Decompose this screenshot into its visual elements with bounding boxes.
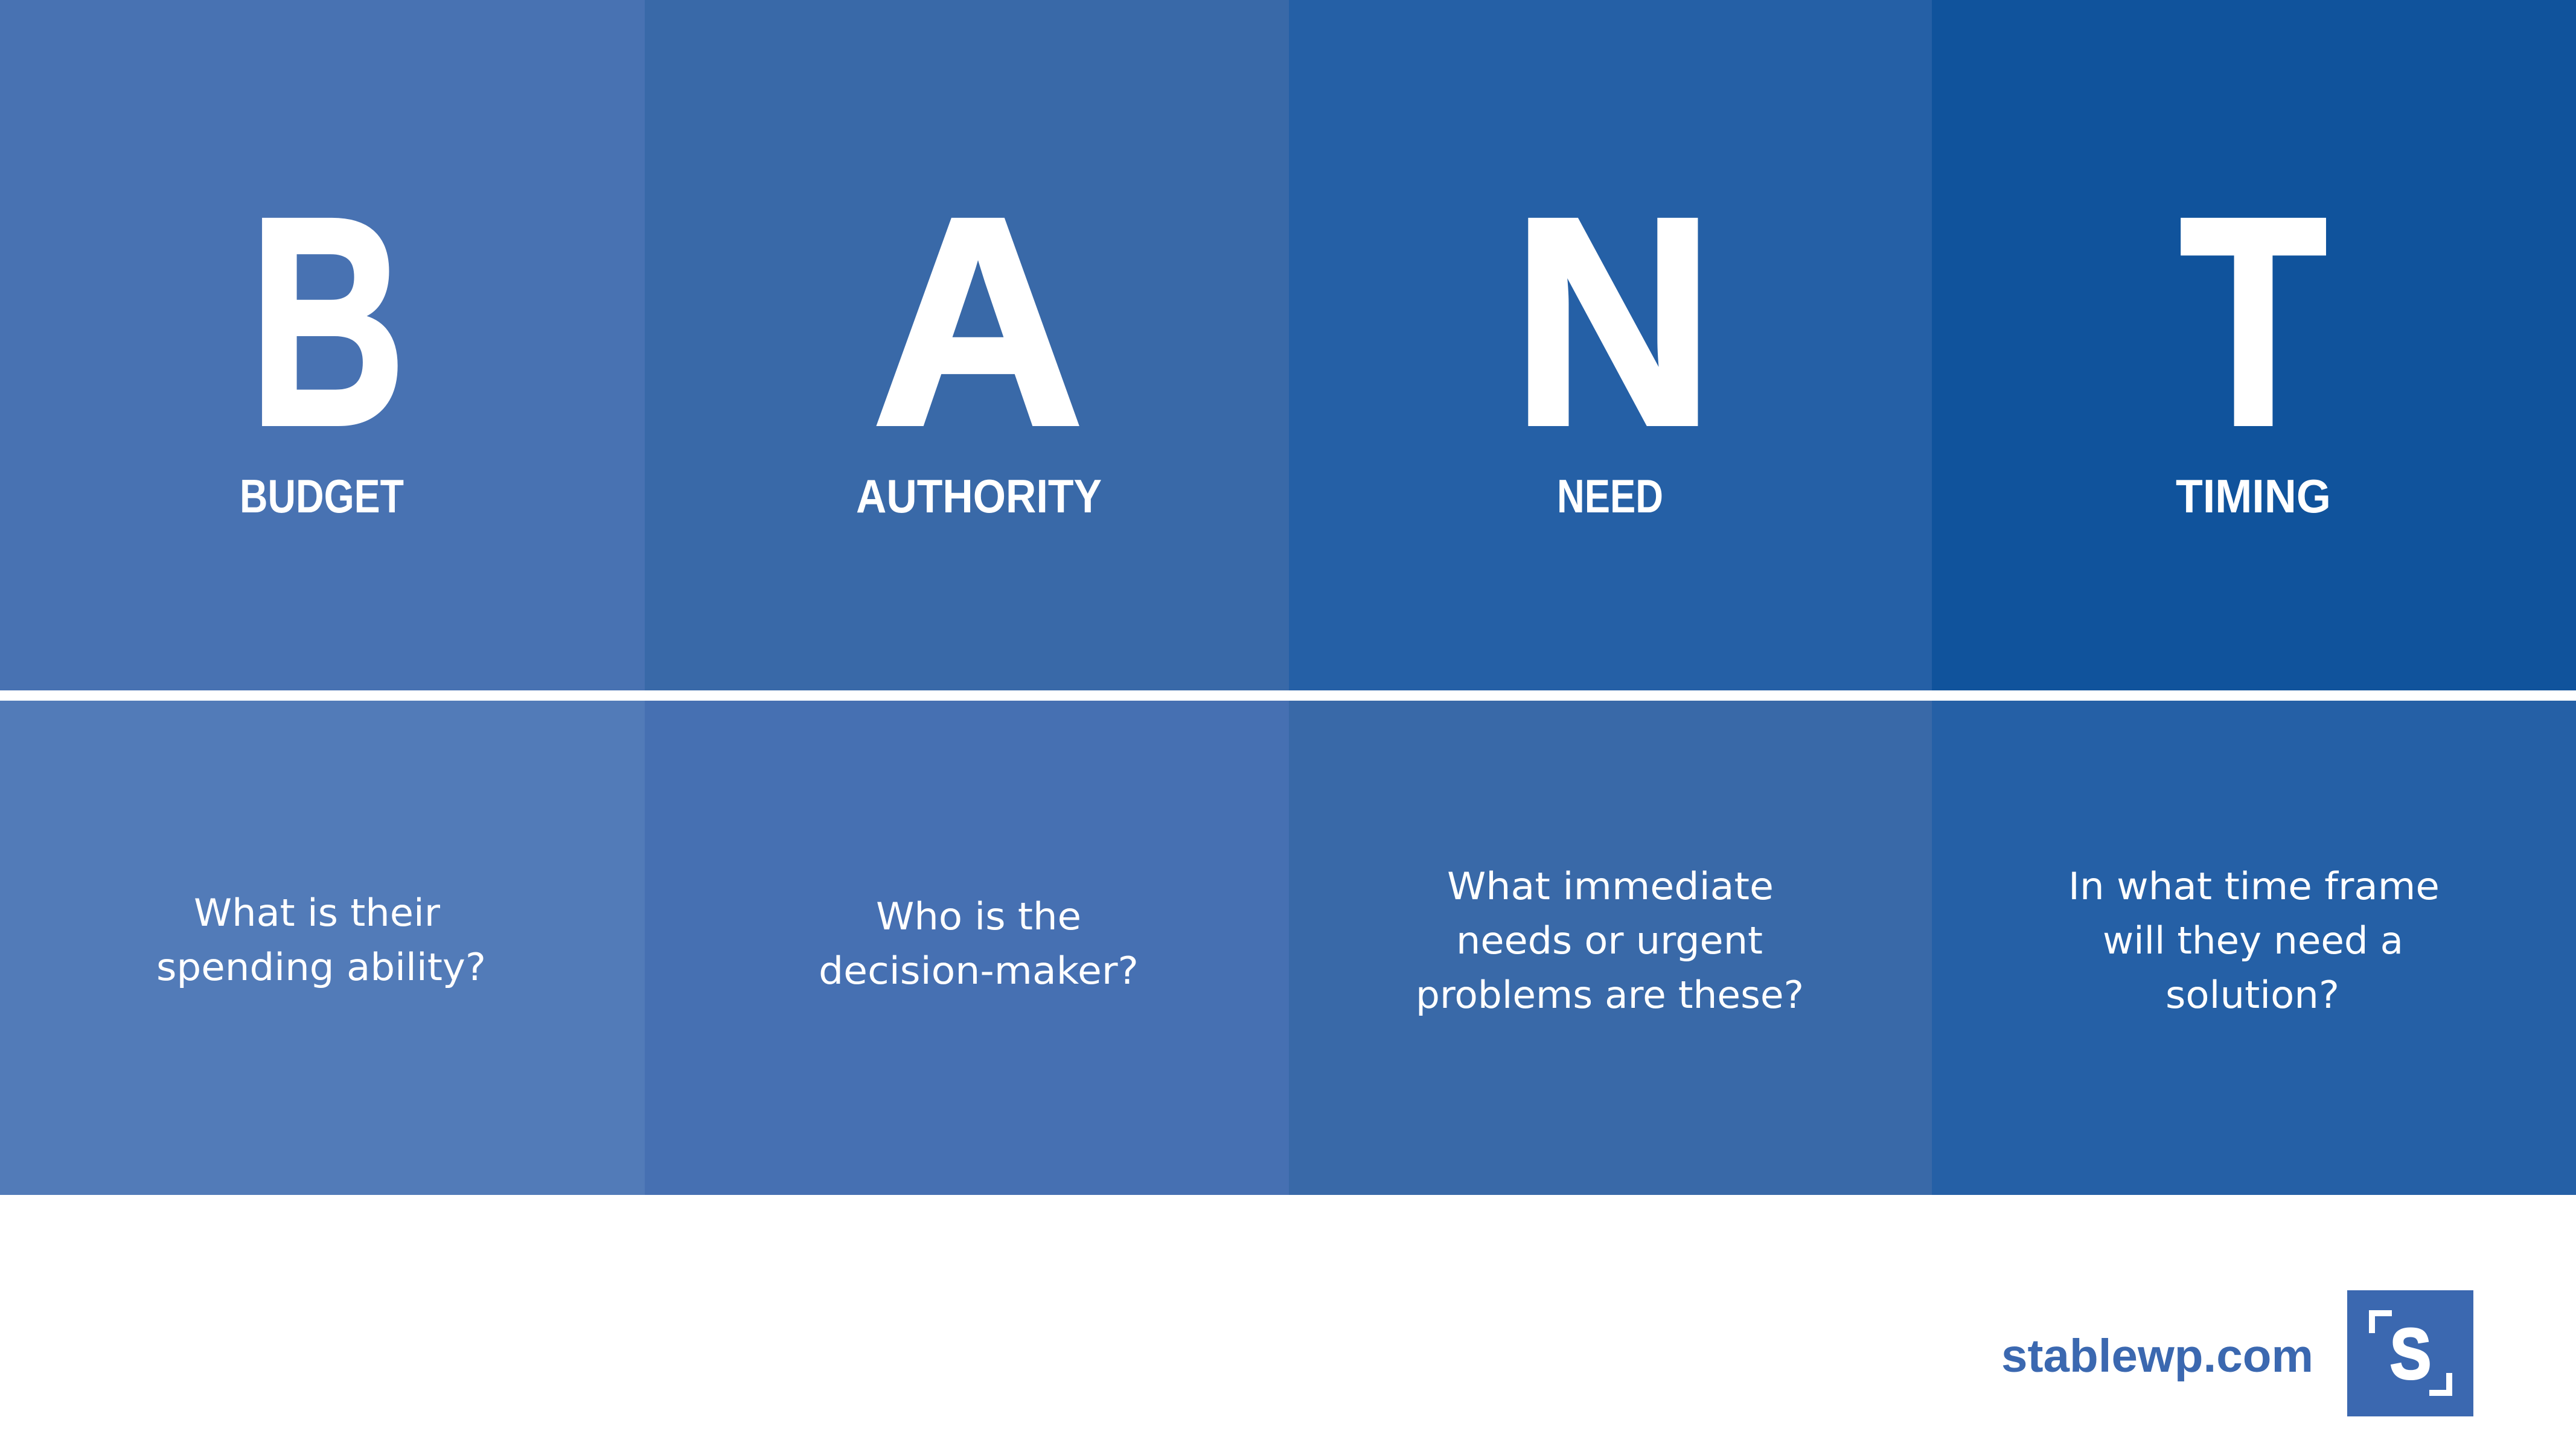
logo corner top-left <box>2369 1310 2392 1333</box>
big letter T: T <box>2180 156 2327 486</box>
text: budget question <box>156 891 486 989</box>
panel: budget question <box>0 701 645 1195</box>
panel: need letter <box>1289 0 1932 690</box>
panel: authority question <box>645 701 1289 1195</box>
logo corner bottom-right <box>2429 1373 2452 1396</box>
text: need question: What immediate <box>1447 864 1774 908</box>
label: need: NEED <box>1557 470 1663 523</box>
panel: need question <box>1289 701 1932 1195</box>
panel: timing question <box>1932 701 2576 1195</box>
panel: budget letter <box>0 0 645 690</box>
big letter N: N <box>1512 156 1715 486</box>
label: authority: AUTHORITY <box>856 470 1102 523</box>
label: budget: BUDGET <box>240 470 404 523</box>
logo <box>2347 1290 2473 1416</box>
logo letter S: S <box>2390 1314 2431 1394</box>
text: need question: needs or urgent <box>1456 919 1763 963</box>
text: budget question: What is their <box>194 891 441 935</box>
text: need question <box>1416 864 1804 1017</box>
panel: timing letter <box>1932 0 2576 690</box>
text: authority question: decision-maker? <box>819 949 1139 993</box>
big letter A: A <box>872 156 1084 486</box>
text: timing question <box>2068 864 2440 1017</box>
text: timing question: In what time frame <box>2068 864 2440 908</box>
text: need question: problems are these? <box>1416 973 1804 1017</box>
big letter B: B <box>249 156 406 486</box>
panel: authority letter <box>645 0 1289 690</box>
text: timing question: solution? <box>2165 973 2339 1017</box>
text: budget question: spending ability? <box>156 945 486 989</box>
label: timing: TIMING <box>2176 470 2331 523</box>
text: authority question: Who is the <box>876 894 1081 938</box>
text: timing question: will they need a <box>2103 919 2403 963</box>
text: authority question <box>819 894 1139 993</box>
website text: stablewp.com <box>2001 1330 2313 1382</box>
